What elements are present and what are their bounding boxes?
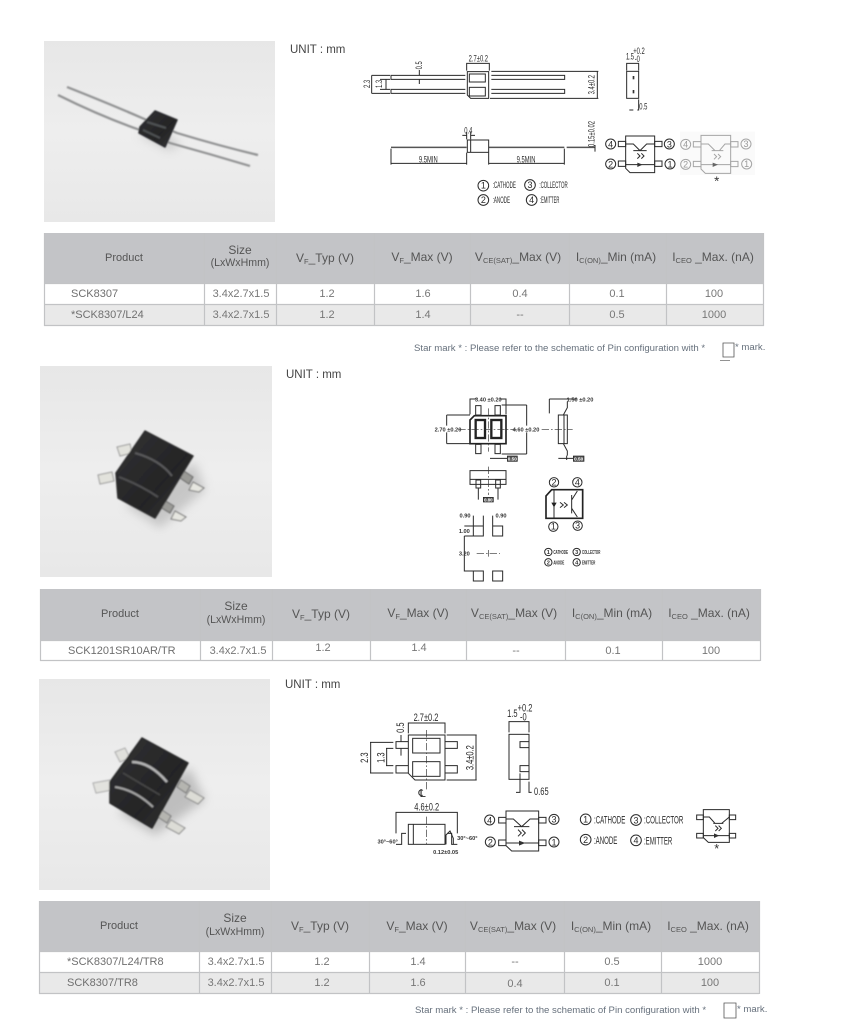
unit label: section 3: UNIT : mm xyxy=(285,679,340,691)
pin legend: 1 xyxy=(547,550,550,556)
footprint: 0.90 xyxy=(495,513,507,519)
table: SCK8307 TR8 specifications: _Max (V) xyxy=(398,919,448,933)
table: SCK8307 TR8 specifications: SCK8307/TR8 xyxy=(67,977,138,989)
table: SCK1201 specifications: C(ON) xyxy=(575,612,597,621)
table: SCK1201 specifications: -- xyxy=(512,645,520,657)
table: SCK8307 TR8 specifications: V xyxy=(470,919,478,933)
pin schematic: star variant xyxy=(680,132,755,188)
side view: 0.65 xyxy=(534,784,549,797)
table: SCK8307 TR8 specifications: 0.1 xyxy=(604,977,620,989)
table: SCK8307 TR8 specifications: I xyxy=(571,919,574,933)
pin schematic: 2 xyxy=(608,159,613,169)
table: SCK8307 TR8 specifications: C(ON) xyxy=(574,925,596,934)
front view: 0.15±0.02 xyxy=(586,121,597,147)
footnote: star mark 1: * mark. xyxy=(735,342,765,353)
pin schematic: star variant: 1 xyxy=(744,159,749,169)
table: SCK8307 specifications: CEO xyxy=(676,256,692,265)
table: SCK8307 specifications: 0.5 xyxy=(609,309,625,321)
pin schematic xyxy=(546,477,583,532)
table: SCK8307 specifications: 3.4x2.7x1.5 xyxy=(213,309,269,321)
table: SCK8307 specifications: 3.4x2.7x1.5 xyxy=(213,288,269,300)
table: SCK8307 specifications: (LxWxHmm) xyxy=(211,257,269,269)
pin legend: 4 xyxy=(575,560,579,566)
table: SCK8307 specifications: 100 xyxy=(705,288,723,300)
pin legend: 4 xyxy=(633,836,638,846)
table: SCK8307 TR8 specifications: 1.2 xyxy=(314,977,330,989)
side view: 1.50 ±0.20 xyxy=(567,397,593,403)
pin schematic: 3 xyxy=(667,139,672,149)
table: SCK8307 TR8 specifications: CE(SAT) xyxy=(478,925,508,934)
front view: 0.4 xyxy=(464,125,472,136)
table: SCK1201 specifications: Product xyxy=(101,608,139,620)
top view: 2.3 xyxy=(357,752,370,763)
table: SCK8307 specifications: CE(SAT) xyxy=(483,256,513,265)
table: SCK8307 specifications: *SCK8307/L24 xyxy=(71,309,144,321)
table: SCK8307 specifications: 1.6 xyxy=(415,288,431,300)
table: SCK8307 specifications: F xyxy=(399,256,404,265)
pin schematic: star variant xyxy=(697,810,736,856)
product photo: SCK8307 leaded sensor xyxy=(44,41,275,222)
pin schematic: 3 xyxy=(551,815,556,825)
technical drawing: SCK8307 leaded package xyxy=(362,46,755,205)
table: SCK8307 TR8 specifications: *SCK8307/L24/TR8 xyxy=(67,956,164,968)
product photo: SCK1201 surface mount sensor xyxy=(40,366,272,577)
table: SCK1201 specifications: Size xyxy=(224,599,248,613)
table: SCK8307 TR8 specifications: V xyxy=(386,919,394,933)
table: SCK8307 specifications: V xyxy=(475,250,483,264)
table: SCK8307 TR8 specifications: 1.2 xyxy=(314,956,330,968)
side view xyxy=(626,46,647,112)
pin legend: 3 xyxy=(527,180,532,190)
table: SCK8307 specifications: _Typ (V) xyxy=(308,251,354,265)
footnote: star mark 2 xyxy=(415,1003,767,1018)
pin legend: 2 xyxy=(547,560,550,566)
table: SCK1201 specifications: _Min (mA) xyxy=(596,606,652,620)
top view xyxy=(362,53,598,98)
table: SCK8307 TR8 specifications: _Max (V) xyxy=(506,919,556,933)
front view: 9.5MIN xyxy=(419,154,438,165)
front view: 4.6±0.2 xyxy=(414,800,439,813)
front view: 30°~60° xyxy=(457,836,478,842)
pin legend: 3 xyxy=(633,815,638,825)
table: SCK8307 specifications: F xyxy=(304,257,309,266)
front view xyxy=(391,121,597,165)
table: SCK8307 specifications: V xyxy=(296,251,304,265)
pin legend: COLLECTOR xyxy=(582,550,600,556)
table: SCK8307 TR8 specifications: 100 xyxy=(701,977,719,989)
table: SCK1201 specifications: CEO xyxy=(672,612,688,621)
table: SCK8307 specifications: I xyxy=(672,250,676,264)
pin legend: 3 xyxy=(575,550,578,556)
table: SCK8307 specifications: I xyxy=(576,250,579,264)
table: SCK1201 specifications: _Max (V) xyxy=(399,606,449,620)
pin legend: :ANODE xyxy=(493,195,510,205)
technical drawing: SCK8307 TR8 package xyxy=(357,701,736,856)
pin schematic: 2 xyxy=(488,837,493,847)
unit label: section 1: UNIT : mm xyxy=(290,44,345,56)
top view: 0.5 xyxy=(393,722,406,733)
side view: +0.2 xyxy=(633,46,645,56)
table: SCK8307 TR8 specifications: _Min (mA) xyxy=(595,919,651,933)
table: SCK8307 TR8 specifications: 1.6 xyxy=(410,977,426,989)
pin legend: ANODE xyxy=(553,560,564,566)
pin legend: :CATHODE xyxy=(493,180,516,190)
table: SCK1201 specifications: 3.4x2.7x1.5 xyxy=(210,645,266,657)
pin legend: 1 xyxy=(583,815,588,825)
top view: 3.40 ±0.20 xyxy=(475,397,502,403)
side view: -0 xyxy=(635,54,640,64)
table: SCK8307 TR8 specifications: 3.4x2.7x1.5 xyxy=(208,977,264,989)
pin schematic: 1 xyxy=(667,159,672,169)
top view: ℄ xyxy=(417,788,426,800)
side view: +0.2 xyxy=(518,701,532,714)
table: SCK8307 TR8 specifications: V xyxy=(291,919,299,933)
technical drawing: SCK1201 package xyxy=(435,397,600,581)
table: SCK8307 TR8 specifications: _Max. (nA) xyxy=(687,919,749,933)
technical drawing: SCK8307 leaded package: :COLLECTOR xyxy=(539,180,568,190)
table: SCK8307 specifications: 0.4 xyxy=(512,288,528,300)
pin schematic xyxy=(485,811,559,851)
table: SCK8307 TR8 specifications xyxy=(39,901,760,994)
table: SCK1201 specifications: 0.1 xyxy=(605,645,621,657)
pin legend: :COLLECTOR xyxy=(644,815,683,827)
top view: 2.7±0.2 xyxy=(414,710,438,723)
table: SCK8307 specifications: 1000 xyxy=(702,309,726,321)
table: SCK8307 TR8 specifications: F xyxy=(394,925,399,934)
table: SCK1201 specifications: 100 xyxy=(702,645,720,657)
footnote: star mark 2: * mark. xyxy=(737,1004,767,1015)
pin schematic xyxy=(606,136,675,173)
product photo: SCK8307 TR8 surface mount sensor xyxy=(39,679,270,890)
pin schematic: star variant: * xyxy=(714,842,719,856)
table: SCK8307 TR8 specifications: _Typ (V) xyxy=(303,919,349,933)
table: SCK8307 TR8 specifications: F xyxy=(299,925,304,934)
table: SCK8307 TR8 specifications: 3.4x2.7x1.5 xyxy=(208,956,264,968)
table: SCK1201 specifications: 1.2 xyxy=(315,642,331,654)
table: SCK8307 specifications: Product xyxy=(105,252,143,264)
pin legend: :ANODE xyxy=(594,835,617,847)
pin schematic: 4 xyxy=(608,139,613,149)
top view: 1.3 xyxy=(374,80,384,88)
pin schematic: 1 xyxy=(551,837,556,847)
table: SCK8307 TR8 specifications: -- xyxy=(511,956,519,968)
front view: 9.5MIN xyxy=(517,154,535,165)
table: SCK1201 specifications: 1.4 xyxy=(411,642,427,654)
table: SCK8307 TR8 specifications: Product xyxy=(100,920,138,932)
side view: -0 xyxy=(520,710,527,723)
footprint: 3.20 xyxy=(459,551,470,557)
table: SCK8307 specifications: 1.2 xyxy=(319,309,335,321)
front view xyxy=(377,800,478,856)
table: SCK8307 TR8 specifications: 1.4 xyxy=(410,956,426,968)
pin legend xyxy=(580,814,683,847)
table: SCK8307 specifications: _Max (V) xyxy=(403,250,453,264)
pin schematic: 1 xyxy=(551,522,556,532)
pin schematic: 4 xyxy=(575,477,580,487)
table: SCK1201 specifications: V xyxy=(471,606,479,620)
table: SCK8307 specifications: Size xyxy=(228,243,252,257)
pin legend: :EMITTER xyxy=(644,835,672,847)
table: SCK1201 specifications: _Max. (nA) xyxy=(688,606,750,620)
table: SCK8307 TR8 specifications: (LxWxHmm) xyxy=(206,926,264,938)
front view: 0.12±0.05 xyxy=(433,850,458,856)
top view: 3.4±0.2 xyxy=(463,745,476,770)
table: SCK8307 specifications xyxy=(44,233,764,326)
side view: 1.5 xyxy=(507,706,518,719)
pin legend: CATHODE xyxy=(553,550,568,556)
pin legend: EMITTER xyxy=(582,560,595,566)
table: SCK1201 specifications xyxy=(40,589,760,661)
pin legend xyxy=(545,548,600,566)
pin legend: 2 xyxy=(481,195,486,205)
table: SCK8307 specifications: V xyxy=(391,250,399,264)
table: SCK1201 specifications: (LxWxHmm) xyxy=(207,614,265,626)
pin schematic: star variant: 3 xyxy=(743,139,748,149)
side view xyxy=(542,397,593,461)
table: SCK8307 specifications: _Max (V) xyxy=(511,250,561,264)
table: SCK8307 specifications: -- xyxy=(516,309,524,321)
pin schematic: 4 xyxy=(487,815,492,825)
pin legend xyxy=(478,180,568,205)
pin legend: :EMITTER xyxy=(540,195,560,205)
table: SCK8307 specifications: C(ON) xyxy=(579,256,601,265)
table: SCK1201 specifications: _Max (V) xyxy=(507,606,557,620)
front view xyxy=(470,467,506,502)
pin schematic: 2 xyxy=(551,477,556,487)
pin schematic: 3 xyxy=(575,521,580,531)
side view xyxy=(507,701,549,797)
footnote: star mark 1: Star mark * : Please refer to the schematic of Pin configuration with * xyxy=(414,343,705,354)
table: SCK1201 specifications: _Typ (V) xyxy=(304,607,350,621)
pin legend: :CATHODE xyxy=(594,814,625,826)
pin schematic: star variant: * xyxy=(714,173,719,188)
table: SCK8307 TR8 specifications: 1000 xyxy=(698,956,722,968)
footprint: 1.00 xyxy=(459,529,470,535)
table: SCK8307 TR8 specifications: Size xyxy=(223,911,247,925)
side view: 1.5 xyxy=(626,51,634,62)
table: SCK8307 specifications: 1.2 xyxy=(319,288,335,300)
table: SCK8307 specifications: _Min (mA) xyxy=(600,250,656,264)
pin legend: 2 xyxy=(583,835,588,845)
table: SCK8307 TR8 specifications: I xyxy=(667,919,671,933)
table: SCK8307 specifications: 0.1 xyxy=(609,288,625,300)
pin legend: 1 xyxy=(481,181,486,191)
top view: 4.60 ±0.20 xyxy=(513,427,539,433)
footnote: star mark 2: Star mark * : Please refer to the schematic of Pin configuration with * xyxy=(415,1005,706,1016)
table: SCK8307 specifications: 1.4 xyxy=(415,309,431,321)
table: SCK1201 specifications: V xyxy=(387,606,395,620)
table: SCK1201 specifications: SCK1201SR10AR/TR xyxy=(68,645,176,657)
pin legend: 4 xyxy=(529,195,534,205)
side view: 0.5 xyxy=(639,101,647,112)
footprint: 0.90 xyxy=(459,513,471,519)
table: SCK1201 specifications: F xyxy=(300,613,305,622)
table: SCK8307 TR8 specifications: 0.4 xyxy=(507,978,523,990)
top view: 1.3 xyxy=(374,752,387,763)
table: SCK8307 specifications: _Max. (nA) xyxy=(692,250,754,264)
top view: 0.50 xyxy=(508,456,517,461)
pin schematic: star variant: 2 xyxy=(683,159,688,169)
table: SCK1201 specifications: F xyxy=(395,612,400,621)
unit label: section 2: UNIT : mm xyxy=(286,369,341,381)
side view: 0.50 xyxy=(574,456,584,461)
table: SCK8307 TR8 specifications: 0.5 xyxy=(604,956,620,968)
top view: 2.7±0.2 xyxy=(469,53,488,64)
front view: 0.80 xyxy=(484,497,493,502)
table: SCK8307 TR8 specifications: CEO xyxy=(671,925,687,934)
top view xyxy=(357,710,477,800)
table: SCK1201 specifications: I xyxy=(572,606,575,620)
top view: 3.4±0.2 xyxy=(586,75,597,94)
footnote: star mark 1 xyxy=(414,342,765,360)
table: SCK1201 specifications: CE(SAT) xyxy=(479,612,509,621)
pin schematic: star variant: 4 xyxy=(683,139,688,149)
footprint xyxy=(459,513,507,581)
table: SCK1201 specifications: V xyxy=(292,607,300,621)
top view: 0.5 xyxy=(414,61,424,69)
table: SCK1201 specifications: I xyxy=(668,606,672,620)
top view: 2.3 xyxy=(362,80,372,88)
top view xyxy=(435,397,539,461)
top view: 2.70 ±0.20 xyxy=(435,427,461,433)
table: SCK8307 specifications: SCK8307 xyxy=(71,288,118,300)
front view: 30°~60° xyxy=(377,839,399,845)
